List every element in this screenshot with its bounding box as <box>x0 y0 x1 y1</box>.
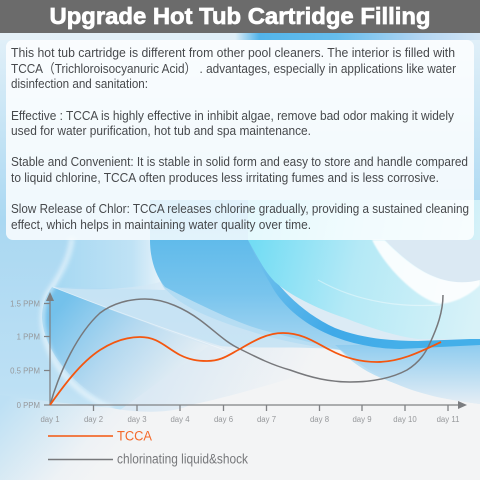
line: TCCA <box>50 333 441 405</box>
y axis labels: 0 PPM <box>17 401 40 410</box>
x axis labels: day 4 <box>170 415 190 424</box>
x axis labels: day 9 <box>352 415 372 424</box>
text block: effective <box>11 108 454 138</box>
x axis labels: day 2 <box>84 415 103 424</box>
legend: TCCA: TCCA <box>117 428 152 444</box>
x axis labels: day 3 <box>127 415 147 424</box>
text block: slow release: effect, which helps in maintaining water quality over time. <box>11 217 311 232</box>
x axis labels: day 6 <box>214 415 233 424</box>
title: Upgrade Hot Tub Cartridge Filling <box>50 3 430 29</box>
x axis labels: day 7 <box>257 415 276 424</box>
y axis labels: 0.5 PPM <box>10 366 40 376</box>
panel: description text <box>6 40 474 240</box>
x axis labels: day 8 <box>310 415 329 424</box>
text block: introduction: This hot tub cartridge is different from other pool cleaners. The interior is filled with <box>11 45 455 60</box>
text block: introduction <box>11 45 457 91</box>
x axis labels: day 1 <box>40 415 60 424</box>
axes <box>44 300 460 411</box>
line: chlorinating liquid and shock <box>50 295 443 405</box>
legend: TCCA <box>48 428 152 444</box>
text block: stable and convenient: to liquid chlorine, TCCA often produces less irritating fumes and is less corrosive. <box>11 170 439 185</box>
text block: introduction: disinfection and sanitation: <box>11 76 148 91</box>
y axis labels: 1 PPM <box>17 332 40 342</box>
text block: slow release <box>11 201 469 232</box>
x axis labels: day 11 <box>437 415 459 424</box>
legend: chlorinating liquid and shock: chlorinating liquid&shock <box>117 452 248 466</box>
text block: effective: used for water purification, hot tub and spa maintenance. <box>11 123 311 138</box>
header bar with title <box>0 0 480 33</box>
y axis labels: 1.5 PPM <box>10 300 40 308</box>
line chart: PPM over days <box>10 292 467 424</box>
y axis labels <box>10 300 40 410</box>
x axis labels: day 10 <box>393 415 417 424</box>
text block: stable and convenient <box>11 154 468 185</box>
x axis labels <box>40 415 459 424</box>
